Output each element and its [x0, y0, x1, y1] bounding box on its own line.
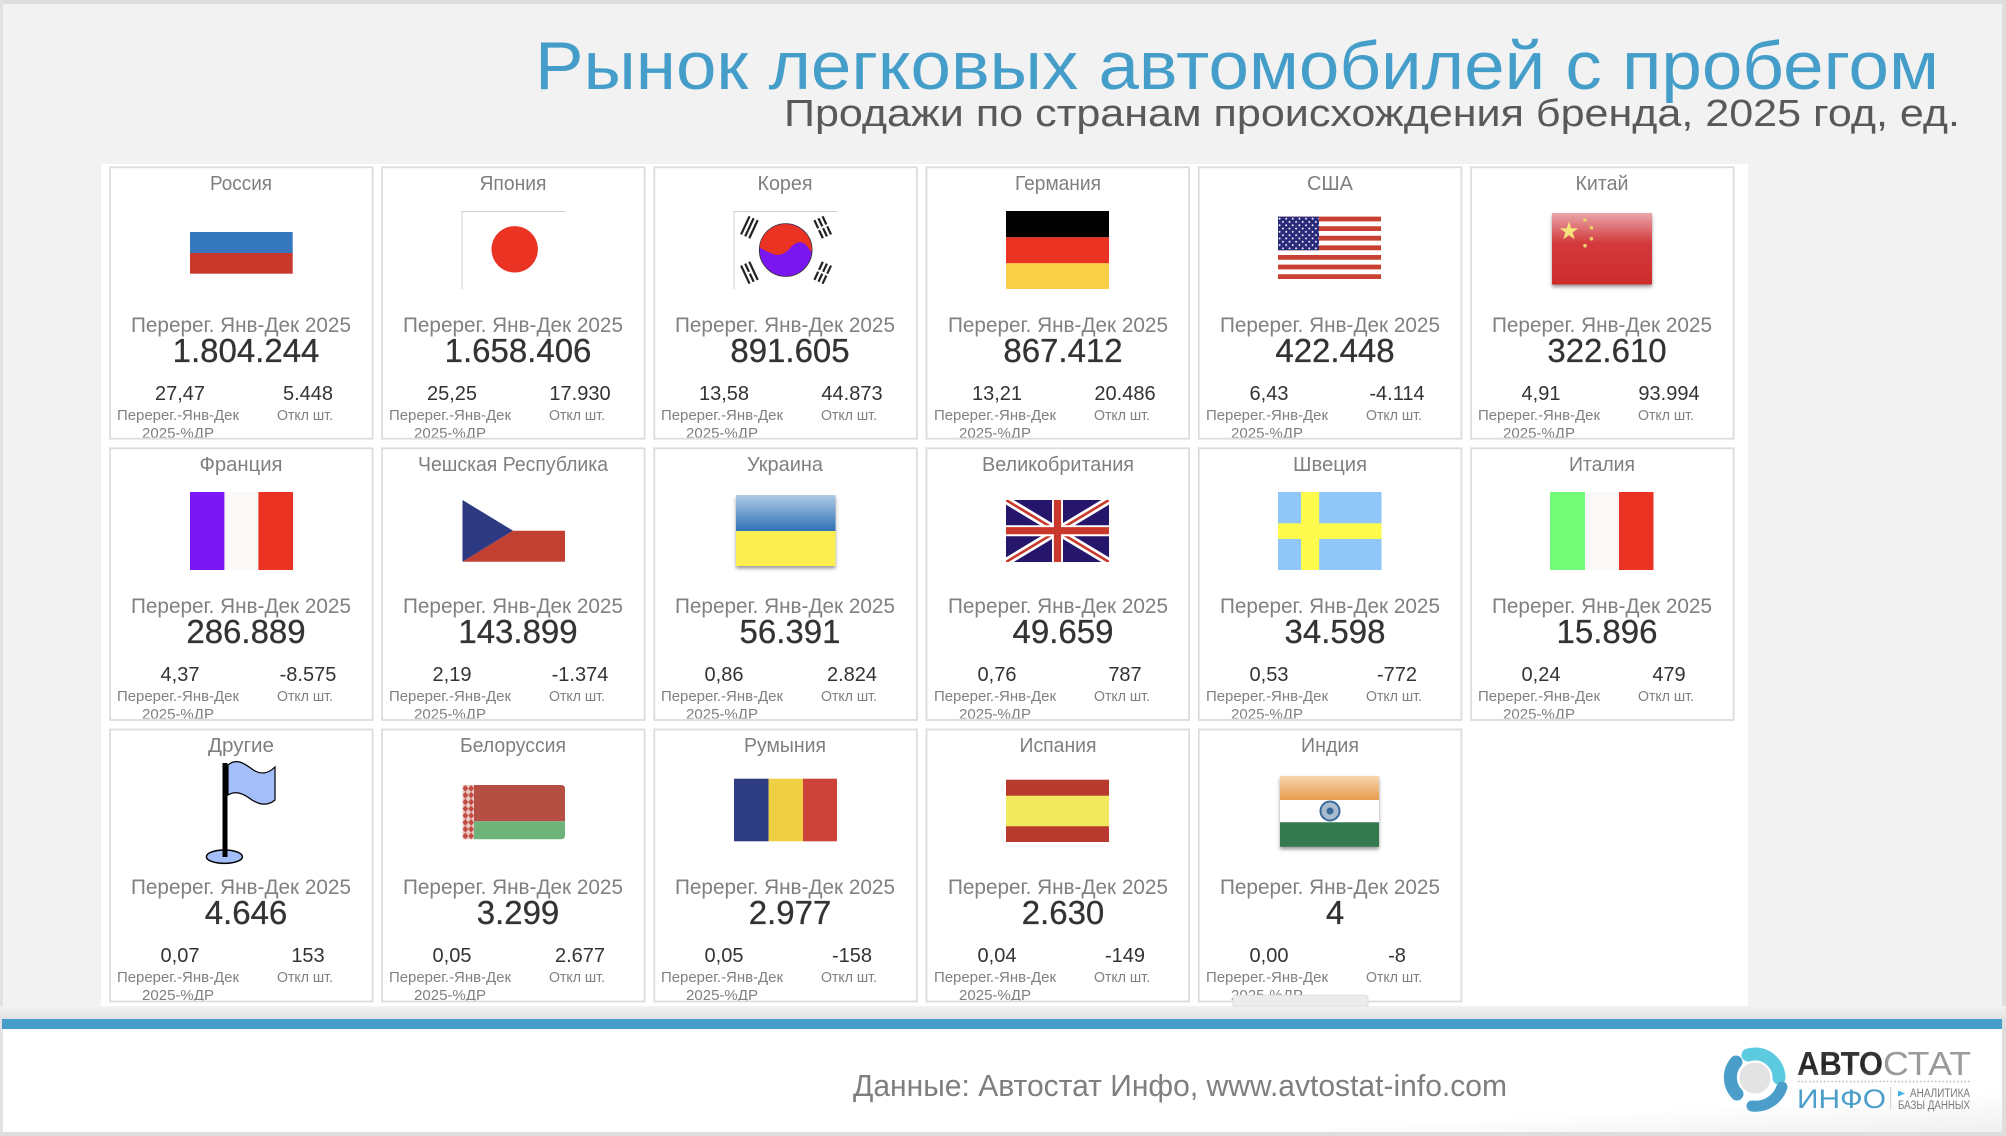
deviation	[549, 383, 611, 424]
card: Румыния	[654, 730, 917, 1004]
deviation: 5.448	[283, 383, 333, 405]
card frame	[110, 730, 373, 1002]
flag: Belarus	[462, 785, 565, 839]
main value: 56.391	[740, 613, 840, 650]
share: Перерег.-Янв-Дек	[1478, 407, 1600, 424]
card frame	[1471, 167, 1734, 439]
share	[118, 667, 239, 718]
country name: Германия	[1015, 173, 1101, 195]
country name: Чешская Республика	[418, 454, 609, 476]
main value: 49.659	[1013, 613, 1113, 650]
share: 2025-%ДР	[414, 425, 486, 442]
deviation: -8.575	[280, 664, 336, 686]
share: 25,25	[427, 383, 477, 405]
flag: China	[1552, 213, 1652, 284]
country name: Индия	[1301, 735, 1359, 757]
panel: cards background	[101, 164, 1748, 1006]
card: Корея	[654, 167, 917, 442]
card frame	[926, 730, 1189, 1002]
flag: United Kingdom	[1006, 500, 1109, 562]
main value: 2.977	[749, 894, 831, 931]
main value: 3.299	[477, 894, 559, 931]
share: Перерег.-Янв-Дек	[389, 688, 511, 705]
logo: Автостат Инфо	[1730, 1045, 1971, 1114]
share	[1479, 667, 1600, 718]
flag: Czech Republic	[462, 500, 565, 562]
share: 0,86	[705, 664, 743, 686]
deviation	[277, 945, 333, 986]
share: 0,53	[1250, 664, 1288, 686]
metric label: Перерег. Янв-Дек 2025	[131, 876, 351, 899]
share: 2025-%ДР	[414, 987, 486, 1004]
share: 2025-%ДР	[959, 706, 1031, 723]
share: 2025-%ДР	[959, 987, 1031, 1004]
share: 2,19	[433, 664, 471, 686]
flag: Italy	[1550, 492, 1654, 570]
share	[935, 667, 1056, 718]
card: Другие	[110, 730, 373, 1004]
deviation	[821, 945, 877, 986]
share: 2025-%ДР	[686, 425, 758, 442]
footer band	[3, 1029, 2002, 1132]
metric label: Перерег. Янв-Дек 2025	[948, 876, 1168, 899]
country name: Украина	[747, 454, 824, 476]
deviation	[1094, 383, 1156, 424]
share	[118, 948, 239, 1000]
deviation: -149	[1105, 945, 1145, 967]
deviation	[1094, 945, 1150, 986]
share: 0,24	[1522, 664, 1560, 686]
share: 2025-%ДР	[1231, 987, 1303, 1004]
card: Украина	[654, 448, 917, 723]
card frame	[1199, 167, 1461, 439]
share: 0,05	[433, 945, 471, 967]
share: Перерег.-Янв-Дек	[661, 969, 783, 986]
deviation: -158	[832, 945, 872, 967]
logo: Автостат Инфо: ИНФО	[1797, 1084, 1886, 1114]
card frame	[382, 167, 645, 439]
card: Россия	[110, 167, 373, 442]
deviation: 153	[291, 945, 325, 967]
share	[1479, 386, 1600, 438]
share: Перерег.-Янв-Дек	[117, 688, 239, 705]
metric label: Перерег. Янв-Дек 2025	[1492, 314, 1712, 337]
share: Перерег.-Янв-Дек	[389, 969, 511, 986]
deviation: Откл шт.	[549, 969, 605, 986]
share: 2025-%ДР	[142, 706, 214, 723]
deviation: -4.114	[1369, 383, 1425, 405]
main value: 15.896	[1557, 613, 1657, 650]
card: Великобритания	[926, 448, 1189, 723]
metric label: Перерег. Янв-Дек 2025	[1220, 595, 1440, 618]
deviation: Откл шт.	[1638, 688, 1694, 705]
share: 13,21	[972, 383, 1022, 405]
flag icon: pennant on pole	[206, 762, 275, 863]
deviation	[277, 383, 333, 424]
deviation: Откл шт.	[1094, 969, 1150, 986]
country name: Франция	[200, 454, 282, 476]
deviation	[549, 664, 608, 705]
deviation	[1094, 664, 1150, 705]
metric label: Перерег. Янв-Дек 2025	[948, 595, 1168, 618]
share: 27,47	[155, 383, 205, 405]
flag: Spain	[1006, 780, 1109, 842]
deviation: Откл шт.	[549, 407, 605, 424]
flag: France	[190, 492, 293, 570]
main value: 34.598	[1285, 613, 1385, 650]
main value: 422.448	[1275, 332, 1395, 369]
metric label: Перерег. Янв-Дек 2025	[1220, 314, 1440, 337]
share: 0,76	[978, 664, 1016, 686]
share: 6,43	[1250, 383, 1288, 405]
flag: India	[1280, 776, 1379, 847]
country name: Испания	[1020, 735, 1096, 757]
card frame	[110, 167, 373, 439]
flag: Romania	[734, 779, 837, 841]
deviation: Откл шт.	[821, 969, 877, 986]
main value: 4	[1326, 894, 1344, 931]
deviation: 20.486	[1094, 383, 1156, 405]
share: 2025-%ДР	[1503, 706, 1575, 723]
source note: Данные: Автостат Инфо, www.avtostat-info.com	[853, 1068, 1507, 1103]
card frame	[926, 448, 1189, 720]
main value: 286.889	[186, 613, 306, 650]
flag: USA	[1278, 217, 1381, 277]
flag: Sweden	[1278, 492, 1382, 570]
logo: Автостат Инфо: АНАЛИТИКА	[1910, 1088, 1970, 1100]
card: Индия	[1199, 730, 1461, 1004]
country name: США	[1307, 173, 1354, 195]
title: Рынок легковых автомобилей с пробегом	[535, 28, 1939, 104]
metric label: Перерег. Янв-Дек 2025	[403, 314, 623, 337]
deviation: Откл шт.	[821, 688, 877, 705]
metric label: Перерег. Янв-Дек 2025	[131, 314, 351, 337]
card frame	[382, 448, 645, 720]
share	[390, 667, 511, 718]
deviation	[821, 383, 883, 424]
main value: 2.630	[1022, 894, 1104, 931]
deviation: -772	[1377, 664, 1417, 686]
share: 2025-%ДР	[959, 425, 1031, 442]
metric label: Перерег. Янв-Дек 2025	[675, 595, 895, 618]
logo: Автостат Инфо: БАЗЫ ДАННЫХ	[1898, 1100, 1970, 1112]
card frame	[926, 167, 1189, 439]
share	[390, 948, 511, 1000]
metric label: Перерег. Янв-Дек 2025	[403, 595, 623, 618]
country name: Великобритания	[982, 454, 1134, 476]
card: Китай	[1471, 167, 1734, 442]
share: Перерег.-Янв-Дек	[661, 688, 783, 705]
share: Перерег.-Янв-Дек	[117, 969, 239, 986]
share: 2025-%ДР	[1231, 425, 1303, 442]
card frame	[1199, 448, 1461, 720]
card frame	[1199, 730, 1461, 1002]
country name: Белоруссия	[460, 735, 566, 757]
share: Перерег.-Янв-Дек	[1206, 688, 1328, 705]
share: Перерег.-Янв-Дек	[117, 407, 239, 424]
deviation: Откл шт.	[1094, 688, 1150, 705]
country name: Другие	[208, 735, 274, 757]
share: Перерег.-Янв-Дек	[1478, 688, 1600, 705]
main value: 1.804.244	[173, 332, 319, 369]
main value: 891.605	[730, 332, 850, 369]
country name: Китай	[1576, 173, 1628, 195]
deviation: 479	[1652, 664, 1686, 686]
flag: Russia	[190, 232, 293, 274]
share: 2025-%ДР	[686, 987, 758, 1004]
share: 13,58	[699, 383, 749, 405]
country name: Россия	[210, 173, 272, 195]
metric label: Перерег. Янв-Дек 2025	[1492, 595, 1712, 618]
deviation	[1366, 945, 1422, 986]
deviation: Откл шт.	[277, 407, 333, 424]
deviation: -1.374	[552, 664, 608, 686]
main value: 4.646	[205, 894, 287, 931]
metric label: Перерег. Янв-Дек 2025	[131, 595, 351, 618]
share	[935, 386, 1056, 438]
share	[1207, 667, 1328, 718]
deviation: Откл шт.	[1094, 407, 1150, 424]
share: 0,00	[1250, 945, 1288, 967]
flag: Japan	[462, 212, 565, 289]
card frame	[110, 448, 373, 720]
flag: Germany	[1006, 211, 1109, 289]
deviation	[1366, 664, 1422, 705]
share	[1207, 948, 1328, 1000]
share: Перерег.-Янв-Дек	[389, 407, 511, 424]
metric label: Перерег. Янв-Дек 2025	[403, 876, 623, 899]
share: Перерег.-Янв-Дек	[934, 688, 1056, 705]
share: 4,91	[1522, 383, 1560, 405]
deviation	[1638, 664, 1694, 705]
card: Белоруссия	[382, 730, 645, 1004]
card frame	[654, 730, 917, 1002]
deviation	[549, 945, 605, 986]
metric label: Перерег. Янв-Дек 2025	[675, 314, 895, 337]
share: Перерег.-Янв-Дек	[934, 969, 1056, 986]
logo wordmark: АВТО	[1797, 1045, 1883, 1082]
card frame	[654, 167, 917, 439]
share: 0,05	[705, 945, 743, 967]
deviation: 787	[1108, 664, 1142, 686]
deviation: 44.873	[821, 383, 883, 405]
scroll tab	[1233, 995, 1368, 1006]
deviation: Откл шт.	[277, 688, 333, 705]
share: 2025-%ДР	[142, 425, 214, 442]
main value: 867.412	[1003, 332, 1123, 369]
share	[662, 948, 783, 1000]
country name: Румыния	[744, 735, 826, 757]
share: 2025-%ДР	[686, 706, 758, 723]
deviation: Откл шт.	[277, 969, 333, 986]
logo: Автостат Инфо: СТАТ	[1883, 1045, 1971, 1082]
share: 0,04	[978, 945, 1016, 967]
share	[935, 948, 1056, 1000]
deviation: 2.677	[555, 945, 605, 967]
share: 2025-%ДР	[1231, 706, 1303, 723]
card: Япония	[382, 167, 645, 442]
share: 4,37	[161, 664, 199, 686]
share: 2025-%ДР	[142, 987, 214, 1004]
share	[118, 386, 239, 438]
logo emblem	[1730, 1054, 1782, 1106]
country name: Швеция	[1293, 454, 1367, 476]
share: Перерег.-Янв-Дек	[661, 407, 783, 424]
share: Перерег.-Янв-Дек	[1206, 407, 1328, 424]
share	[662, 386, 783, 438]
deviation: Откл шт.	[1638, 407, 1694, 424]
deviation: 17.930	[549, 383, 611, 405]
deviation: Откл шт.	[1366, 407, 1422, 424]
card: Германия	[926, 167, 1189, 442]
country name: Корея	[758, 173, 812, 195]
deviation: Откл шт.	[549, 688, 605, 705]
deviation: 2.824	[827, 664, 877, 686]
deviation: Откл шт.	[1366, 688, 1422, 705]
card: Чешская Республика	[382, 448, 645, 723]
deviation: -8	[1388, 945, 1406, 967]
deviation	[277, 664, 336, 705]
share: 0,07	[161, 945, 199, 967]
share: Перерег.-Янв-Дек	[934, 407, 1056, 424]
share: Перерег.-Янв-Дек	[1206, 969, 1328, 986]
card frame	[382, 730, 645, 1002]
share	[1207, 386, 1328, 438]
deviation	[821, 664, 877, 705]
card: Швеция	[1199, 448, 1461, 723]
share	[390, 386, 511, 438]
main value: 143.899	[458, 613, 578, 650]
share: 2025-%ДР	[414, 706, 486, 723]
deviation: 93.994	[1638, 383, 1700, 405]
country name: Япония	[480, 173, 546, 195]
card frame	[1471, 448, 1734, 720]
metric label: Перерег. Янв-Дек 2025	[1220, 876, 1440, 899]
deviation: Откл шт.	[821, 407, 877, 424]
flag: Korea	[734, 212, 837, 289]
subtitle: Продажи по странам происхождения бренда, 2025 год, ед.	[784, 93, 1960, 135]
card: США	[1199, 167, 1461, 442]
main value: 322.610	[1547, 332, 1667, 369]
deviation: Откл шт.	[1366, 969, 1422, 986]
card: Франция	[110, 448, 373, 723]
card frame	[654, 448, 917, 720]
country name: Италия	[1569, 454, 1635, 476]
deviation	[1638, 383, 1700, 424]
flag: Ukraine	[736, 495, 836, 566]
card: Испания	[926, 730, 1189, 1004]
main value: 1.658.406	[445, 332, 591, 369]
metric label: Перерег. Янв-Дек 2025	[675, 876, 895, 899]
share: 2025-%ДР	[1503, 425, 1575, 442]
blue divider bar	[2, 1019, 2002, 1029]
card: Италия	[1471, 448, 1734, 723]
metric label: Перерег. Янв-Дек 2025	[948, 314, 1168, 337]
share	[662, 667, 783, 718]
deviation	[1366, 383, 1425, 424]
